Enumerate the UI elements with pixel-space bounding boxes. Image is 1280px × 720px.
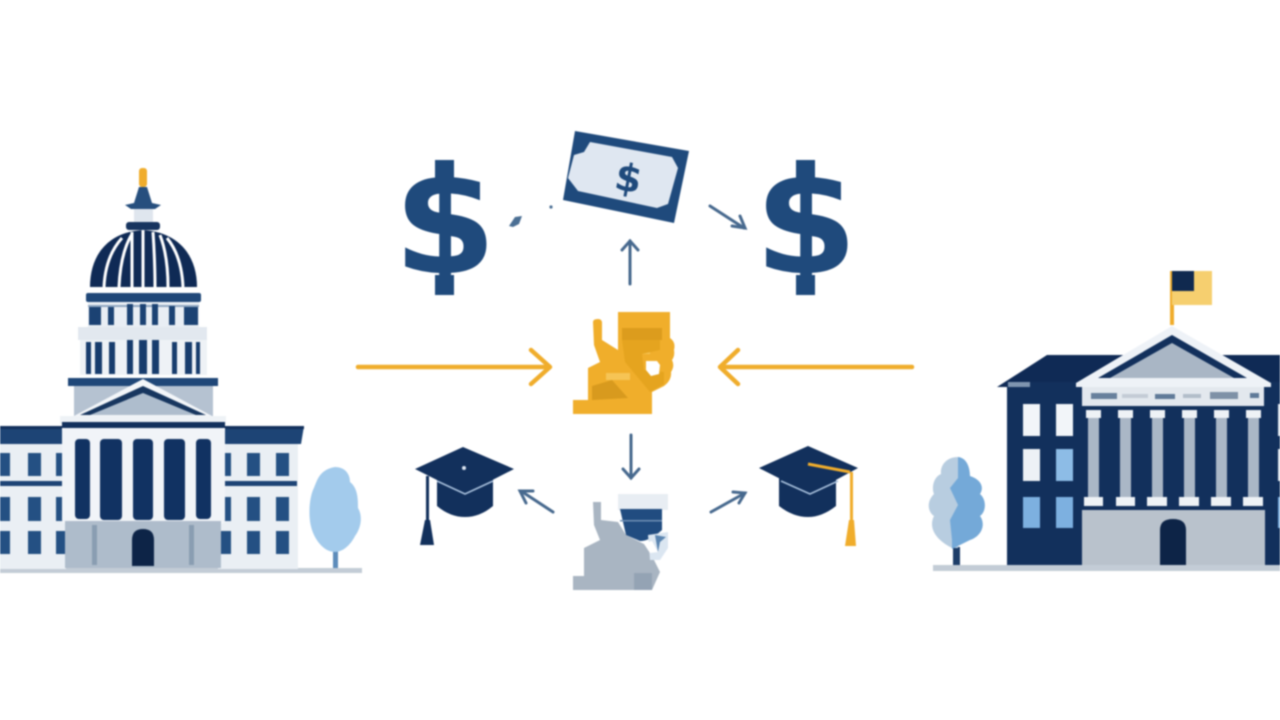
- arrow: to right cap: [711, 492, 745, 512]
- tree left: [309, 467, 361, 568]
- university pediment: [1076, 326, 1271, 387]
- university windows: [1023, 404, 1280, 528]
- icon: left graduation cap: [415, 447, 514, 545]
- capitol pediment: [74, 379, 212, 416]
- icon: left dollar sign: $: [394, 136, 496, 308]
- university columns: [1084, 410, 1263, 506]
- capitol building: [0, 168, 362, 573]
- flag: [1170, 271, 1212, 325]
- icon: right graduation cap: [759, 446, 858, 546]
- gold arrow: right into centre: [720, 350, 912, 384]
- icon: banknote: [563, 131, 689, 223]
- icon: right dollar sign: $: [755, 136, 857, 308]
- icon: gold hand holding coins: [573, 312, 674, 414]
- arrow: up to banknote: [622, 241, 638, 284]
- university building: [933, 271, 1280, 571]
- icon: grey and blue hand holding coins: [573, 494, 668, 590]
- arrow: to left cap: [520, 491, 553, 512]
- icon: banknote: $: [611, 154, 646, 202]
- gold arrow: left into centre: [358, 350, 550, 384]
- dome: [90, 230, 197, 287]
- capitol portico: [62, 428, 225, 524]
- entablature: [1082, 387, 1264, 406]
- capitol wings: [0, 444, 298, 569]
- tree right: [929, 457, 985, 565]
- arrow: down from gold icon: [623, 435, 639, 478]
- arrow fragment: banknote to left dollar: [509, 205, 553, 227]
- arrow: banknote to right dollar: [710, 206, 745, 228]
